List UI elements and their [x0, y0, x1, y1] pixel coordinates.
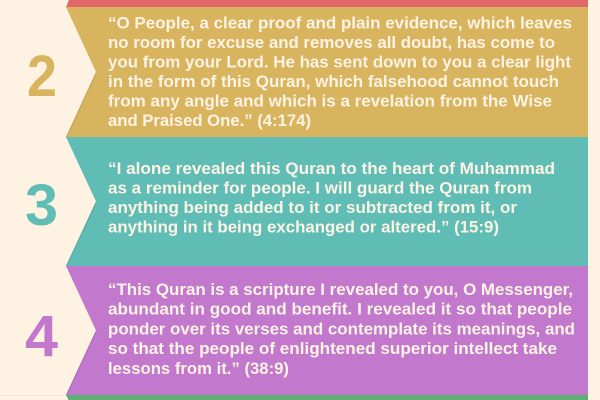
verse 2 text: and Praised One.” (4:174): [108, 111, 311, 130]
verse 4 text: “This Quran is a scripture I revealed to you, O Messenger,: [108, 280, 573, 299]
panel: verse 3: [25, 137, 588, 266]
verse 3 text: “I alone revealed this Quran to the heart of Muhammad: [108, 159, 555, 178]
verse 2 text: “O People, a clear proof and plain evidence, which leaves: [108, 13, 572, 32]
number 2: 2: [27, 44, 57, 109]
panel: verse 4: [25, 266, 588, 395]
verse 2 text: from any angle and which is a revelation from the Wise: [108, 92, 552, 110]
number 4: 4: [25, 304, 58, 369]
panel: red band top edge: [66, 0, 588, 7]
verse 2 text: no room for excuse and removes all doubt, has come to: [108, 33, 555, 52]
number 3: 3: [25, 173, 58, 238]
verse 4 text: abundant in good and benefit. I revealed it so that people: [108, 300, 572, 319]
verse 4 text: [108, 280, 575, 378]
verse 2 text: [108, 13, 572, 130]
panel: verse 2: [27, 7, 588, 137]
verse 4 text: ponder over its verses and contemplate its meanings, and: [108, 320, 575, 338]
verse 4 text: lessons from it.” (38:9): [108, 359, 289, 378]
panel: green band bottom edge: [0, 395, 588, 400]
verse 2 text: you from your Lord. He has sent down to you a clear light: [108, 52, 571, 71]
verse 3 text: anything being added to it or subtracted from it, or: [108, 198, 517, 217]
verse 4 text: so that the people of enlightened superior intellect take: [108, 339, 557, 358]
verse 3 text: as a reminder for people. I will guard the Quran from: [108, 179, 532, 198]
verse 2 text: in the form of this Quran, which falsehood cannot touch: [108, 72, 559, 91]
verse 3 text: anything in it being exchanged or altered.” (15:9): [108, 218, 499, 237]
verse 3 text: [108, 159, 555, 237]
